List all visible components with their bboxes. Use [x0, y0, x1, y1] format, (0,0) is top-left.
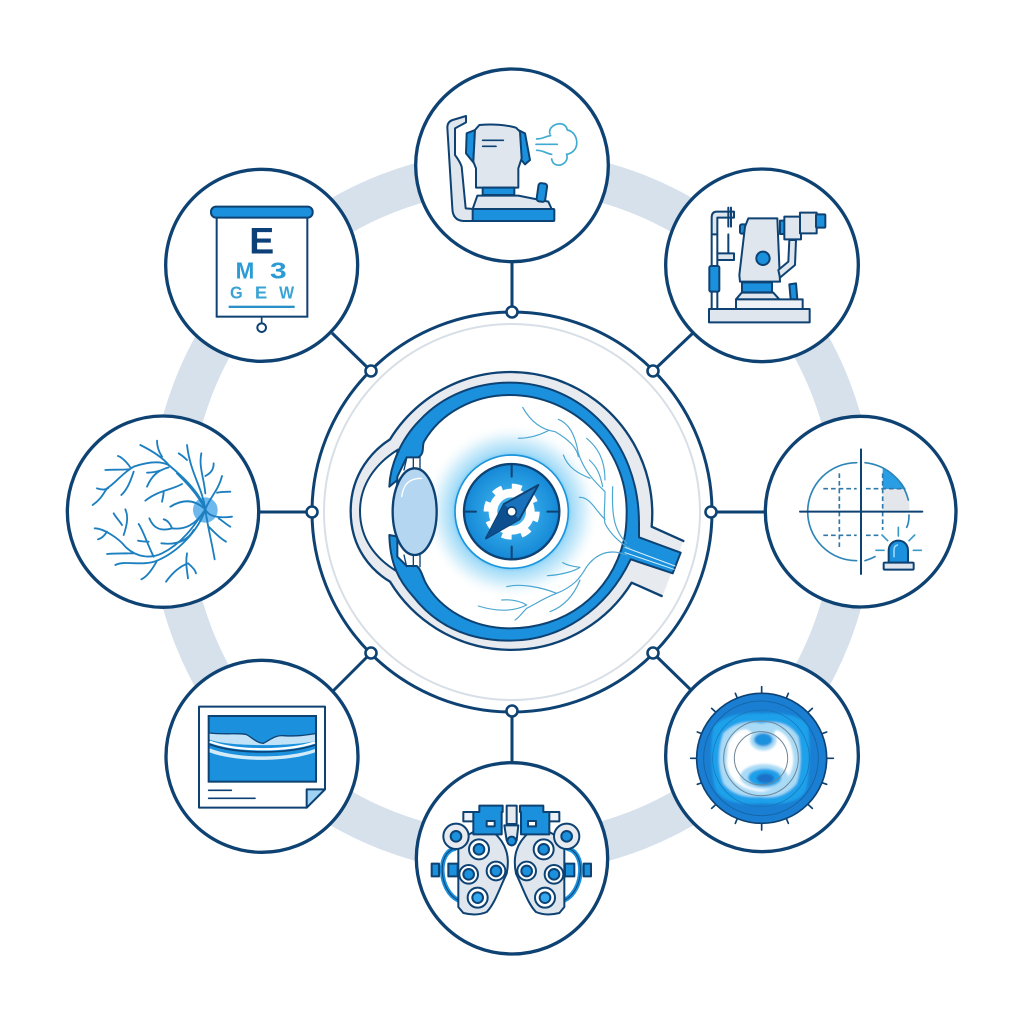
chart letters: E	[249, 219, 274, 261]
outer pale ring	[170, 170, 854, 854]
satellite: air-puff tonometer	[416, 69, 608, 262]
tonometer head	[466, 125, 554, 221]
optic disc	[193, 497, 218, 523]
chart pull cord	[257, 317, 266, 332]
chart board	[217, 215, 307, 317]
air puff	[536, 124, 577, 165]
satellite: phoropter	[416, 763, 608, 954]
chart letters: W	[279, 282, 295, 302]
eye: retinal vessels	[478, 407, 630, 620]
microscope body	[740, 224, 747, 234]
report sheet	[199, 707, 325, 808]
eye: zonule fibres	[404, 457, 420, 567]
shaded quadrants	[883, 468, 906, 489]
connector nodes	[306, 306, 716, 716]
connector spokes	[258, 262, 767, 765]
phoropter: bridge	[504, 806, 518, 845]
phoropter: left half	[432, 806, 508, 914]
compass: needle	[486, 485, 538, 538]
central eye cross-section	[351, 372, 683, 650]
eye: cornea interior	[360, 450, 397, 572]
satellite: slit lamp	[666, 169, 858, 362]
tick marks	[691, 687, 833, 830]
crosshair axes	[800, 449, 922, 574]
report caption lines	[209, 790, 255, 798]
page fold	[307, 789, 325, 808]
chart roller	[211, 207, 313, 218]
phoropter: right half	[515, 806, 591, 914]
chart letters	[230, 219, 295, 302]
chart letters: E	[255, 282, 267, 302]
chin rest	[447, 116, 473, 221]
central hub ring	[312, 312, 712, 712]
eye: lens	[393, 468, 437, 555]
chart letters: G	[230, 282, 243, 302]
scan image	[209, 716, 316, 782]
chart letters: 3	[270, 257, 287, 283]
eye: compass	[455, 455, 568, 568]
eye: optic nerve fibres	[625, 547, 675, 569]
alert beacon	[876, 527, 921, 570]
vessel tree	[93, 441, 232, 582]
chart baseline	[229, 306, 295, 308]
eye: vitreous body	[397, 395, 627, 628]
satellite: eye chart	[166, 169, 358, 361]
eye: blue choroid and optic nerve	[389, 383, 681, 641]
head rest frame	[712, 208, 734, 308]
chart letters: M	[236, 257, 254, 283]
eye: sclera	[351, 372, 683, 650]
contour rings	[724, 721, 798, 796]
satellite: corneal topography	[666, 659, 858, 852]
satellite: OCT scan report	[166, 660, 358, 852]
field circle	[808, 463, 909, 561]
satellite: visual field	[765, 416, 956, 607]
retinal layers	[210, 733, 315, 760]
eye: sclera outline	[351, 372, 683, 650]
satellite: retinal fundus	[67, 416, 259, 607]
compass: gear	[487, 487, 536, 536]
dashed grid	[823, 473, 905, 550]
topography map	[697, 693, 827, 823]
eye: glow	[423, 423, 600, 600]
